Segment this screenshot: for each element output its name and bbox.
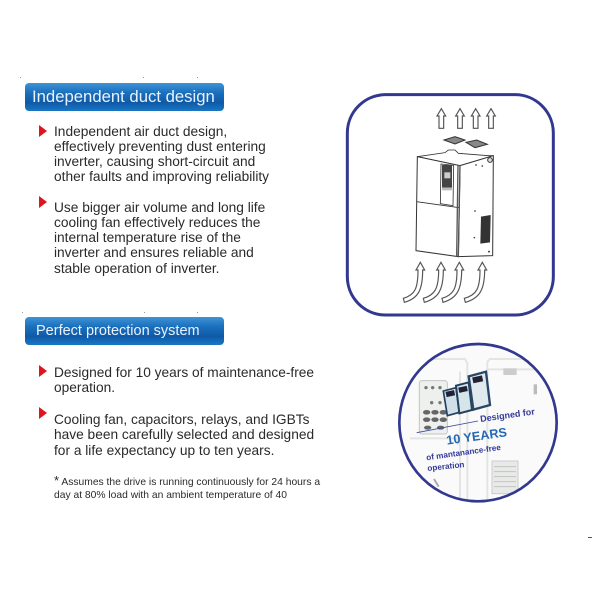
icon: exhaust arrows <box>437 109 495 128</box>
inverter side <box>458 156 493 257</box>
control panel <box>419 381 447 434</box>
footnote <box>54 473 320 501</box>
footnote: day at 80% load with an ambient temperature of 40 <box>54 490 287 501</box>
text: bigger air volume: inverter and ensures reliable and <box>54 245 254 260</box>
text: bigger air volume <box>54 200 265 276</box>
panel: airflow diagram <box>347 95 553 315</box>
icon: cooling fans <box>444 137 487 148</box>
text: bigger air volume: stable operation of inverter. <box>54 261 220 276</box>
bullet marker 1 <box>39 125 47 137</box>
keypad <box>440 164 454 206</box>
heading: independent duct design <box>25 83 224 111</box>
cabinet background <box>410 358 537 500</box>
icon: three drives <box>443 372 490 416</box>
text: bigger air volume: internal temperature rise of the <box>54 230 241 245</box>
callout text: 10 YEARS <box>445 425 508 448</box>
callout text: operation <box>427 460 465 473</box>
text: independent air duct: inverter, causing short-circuit and <box>54 154 255 169</box>
callout text: Designed for <box>480 406 536 424</box>
icon: intake arrows <box>403 262 487 302</box>
illustrations <box>20 77 592 538</box>
text: ten years maintenance free: Designed for 10 years of maintenance-free <box>54 364 314 380</box>
text: independent air duct: other faults and improving reliability <box>54 169 269 184</box>
text: ten years maintenance free <box>54 364 314 395</box>
footnote: * Assumes the drive is running continuously for 24 hours a <box>54 473 320 488</box>
panel: ten year badge <box>399 344 557 505</box>
heading: perfect protection system <box>25 317 224 345</box>
text: bigger air volume: cooling fan effectively reduces the <box>54 215 260 230</box>
text: ten years maintenance free: operation. <box>54 380 115 395</box>
frame <box>347 95 553 315</box>
scan specks <box>20 77 592 538</box>
text: independent air duct: Independent air duct design, <box>54 124 227 138</box>
callout text <box>426 406 536 473</box>
bullet marker 4 <box>39 407 47 419</box>
inverter front <box>416 157 460 257</box>
bullet marker 2 <box>39 196 47 208</box>
inverter body <box>416 150 493 257</box>
text: independent air duct: effectively preventing dust entering <box>54 139 266 154</box>
circle outline <box>399 344 557 501</box>
text: components selected: for a life expectancy up to ten years. <box>54 443 274 458</box>
callout line <box>417 421 478 433</box>
heading: independent duct design: Independent duct design <box>32 87 215 106</box>
bullet marker 3 <box>39 365 47 377</box>
text: components selected <box>54 412 314 458</box>
vent grille <box>480 215 491 244</box>
text: components selected: have been carefully selected and designed <box>54 427 314 442</box>
heading: perfect protection system: Perfect protection system <box>36 323 200 339</box>
text: independent air duct <box>54 124 269 184</box>
text: components selected: Cooling fan, capacitors, relays, and IGBTs <box>54 412 309 427</box>
inverter top <box>417 150 493 166</box>
callout text: of mantanance-free <box>426 443 502 462</box>
text: bigger air volume: Use bigger air volume and long life <box>54 200 265 214</box>
